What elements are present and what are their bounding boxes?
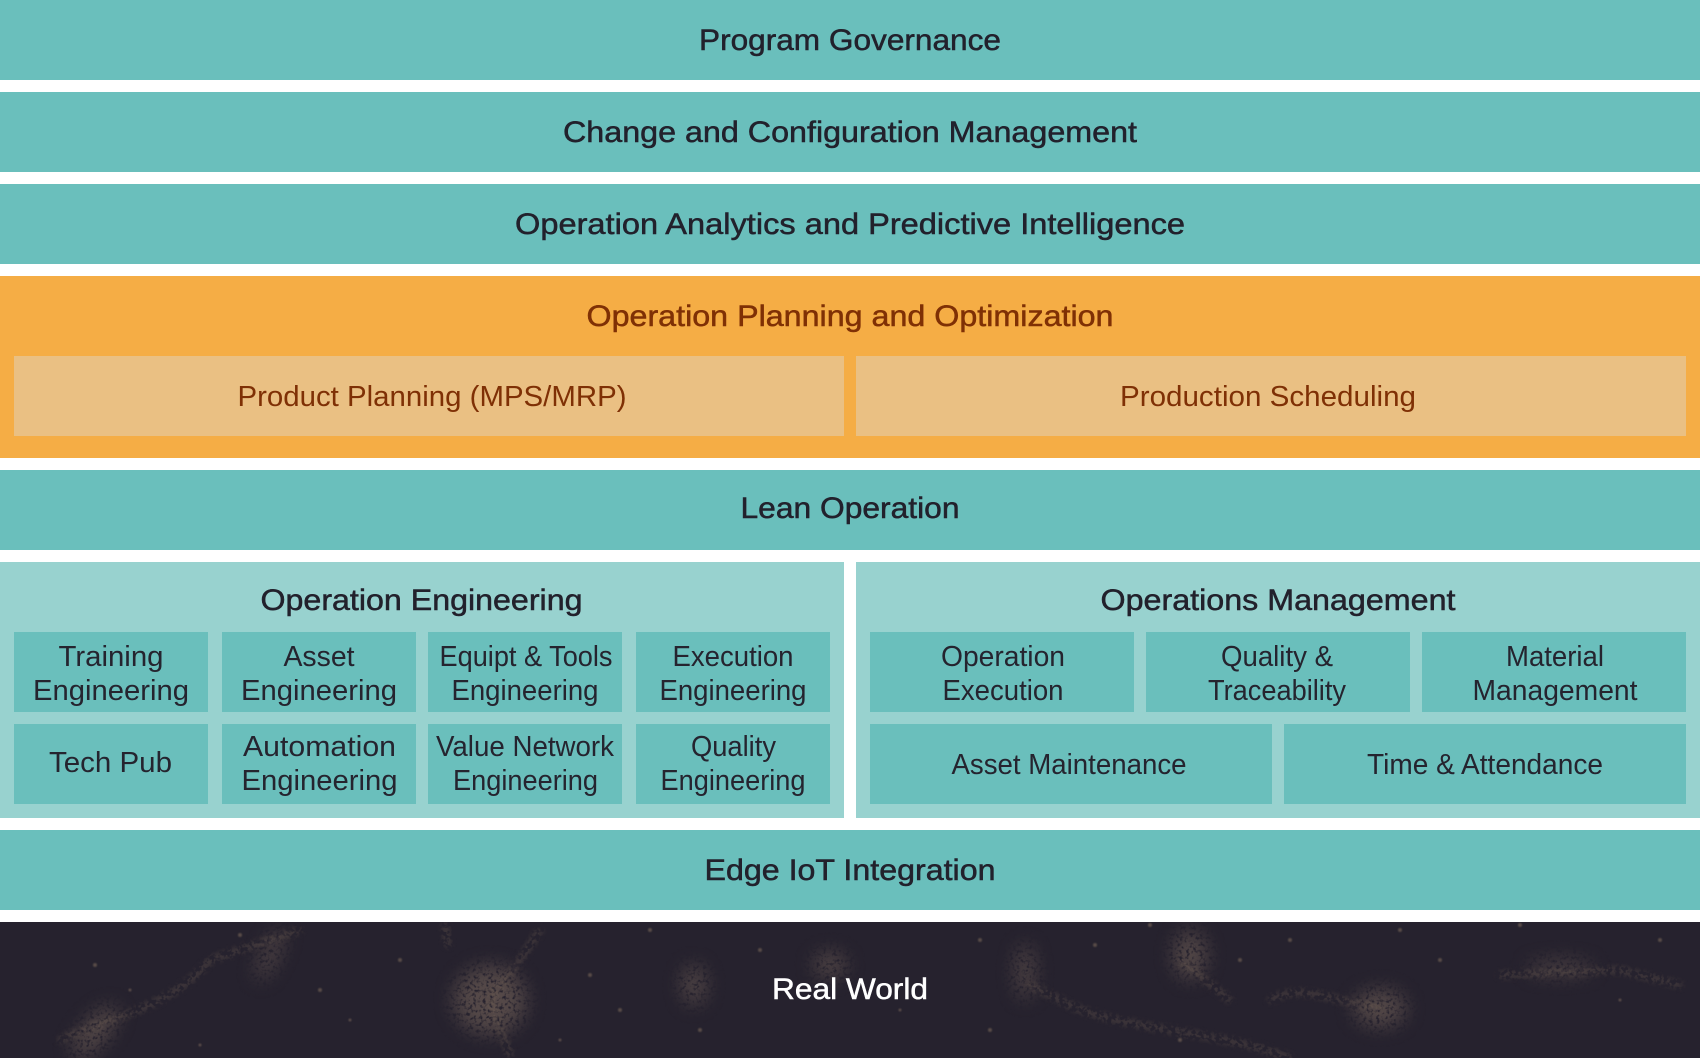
cell: Quality Engineering: Engineering: [660, 765, 806, 797]
cell: Automation Engineering: [222, 724, 416, 804]
band: Lean Operation: [0, 470, 1700, 550]
cell: Execution Engineering: Execution: [672, 641, 794, 673]
cell: Asset Maintenance: Asset Maintenance: [952, 749, 1186, 781]
band: Lean Operation: Lean Operation: [740, 492, 960, 525]
cell: Asset Engineering: Engineering: [241, 675, 397, 707]
cell: Automation Engineering: Engineering: [242, 765, 398, 797]
cell: Operation Execution: Operation: [941, 641, 1065, 673]
cell: Equipt and Tools Engineering: Engineering: [452, 675, 598, 707]
cell: Value Network Engineering: [428, 724, 622, 804]
cell: Execution Engineering: [636, 632, 830, 712]
cell: Material Management: Material: [1506, 641, 1604, 673]
band: Program Governance: Program Governance: [699, 24, 1001, 57]
band: Change and Configuration Management: [0, 92, 1700, 172]
cell: Execution Engineering: Engineering: [660, 675, 806, 707]
cell: Operation Execution: [870, 632, 1134, 712]
cell: Value Network Engineering: Engineering: [453, 765, 598, 797]
cell: Quality and Traceability: [1146, 632, 1410, 712]
panel: Operation Planning and Optimization: Operation Planning and Optimization: [586, 300, 1114, 333]
cell: Asset Engineering: [222, 632, 416, 712]
cell: Training Engineering: Training: [58, 641, 164, 673]
cell: Material Management: Management: [1472, 675, 1638, 707]
cell: Equipt and Tools Engineering: Equipt & Tools: [440, 641, 612, 673]
cell: Production Scheduling: [856, 356, 1686, 436]
cell: Product Planning: [14, 356, 844, 436]
cell: Time and Attendance: [1284, 724, 1686, 804]
cell: Quality and Traceability: Traceability: [1208, 675, 1347, 707]
cell: Quality Engineering: Quality: [691, 731, 777, 763]
panel: Real World night-lights background: [0, 922, 1700, 1058]
cell: Training Engineering: [14, 632, 208, 712]
cell: Automation Engineering: Automation: [243, 731, 396, 763]
cell: Training Engineering: Engineering: [33, 675, 189, 707]
panel: Operation Planning and Optimization: [0, 276, 1700, 458]
band: Program Governance: [0, 0, 1700, 80]
label: Real World: Real World: [772, 973, 928, 1006]
cell: Tech Pub: [14, 724, 208, 804]
cell: Tech Pub: Tech Pub: [49, 747, 172, 779]
panel: Operation Engineering: [0, 562, 844, 818]
cell: Production Scheduling: Production Scheduling: [1120, 381, 1416, 413]
cell: Time and Attendance: Time & Attendance: [1367, 749, 1603, 781]
cell: Asset Maintenance: [870, 724, 1272, 804]
cell: Quality and Traceability: Quality &: [1221, 641, 1333, 673]
cell: Material Management: [1422, 632, 1686, 712]
cell: Product Planning: Product Planning (MPS/MRP): [238, 381, 626, 413]
band: Change and Configuration Management: Change and Configuration Management: [563, 116, 1138, 149]
cell: Equipt and Tools Engineering: [428, 632, 622, 712]
band: Edge IoT Integration: Edge IoT Integration: [704, 854, 996, 887]
cell: Value Network Engineering: Value Network: [436, 731, 615, 763]
band: Edge IoT Integration: [0, 830, 1700, 910]
cell: Asset Engineering: Asset: [284, 641, 355, 673]
band: Operation Analytics and Predictive Intelligence: Operation Analytics and Predictive Intelligence: [515, 208, 1185, 241]
panel: Operations Management: Operations Management: [1100, 584, 1456, 617]
cell: Operation Execution: Execution: [942, 675, 1064, 707]
panel: Operations Management: [856, 562, 1700, 818]
band: Operation Analytics and Predictive Intelligence: [0, 184, 1700, 264]
cell: Quality Engineering: [636, 724, 830, 804]
panel: Operation Engineering: Operation Engineering: [260, 584, 582, 617]
